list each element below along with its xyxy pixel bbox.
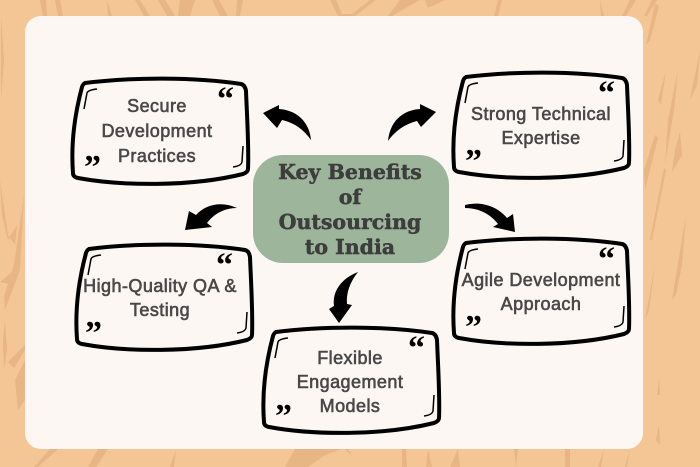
- card: Secure Development Practices: “: [217, 81, 234, 118]
- card: Strong Technical Expertise: “: [598, 75, 615, 112]
- arrow: to Agile Development Approach: [465, 204, 515, 232]
- card: Agile Development Approach: Approach: [501, 294, 581, 314]
- card: High-Quality QA & Testing: ”: [85, 315, 102, 352]
- card: Strong Technical Expertise: ”: [465, 143, 482, 180]
- card: Strong Technical Expertise: Expertise: [501, 128, 581, 148]
- central title block: Outsourcing: [279, 210, 421, 234]
- card: Secure Development Practices: [72, 79, 248, 186]
- card: Secure Development Practices: Secure: [127, 96, 187, 116]
- arrow: to Flexible Engagement Models: [329, 272, 358, 323]
- card: Agile Development Approach: ”: [465, 309, 482, 346]
- card: High-Quality QA & Testing: High-Quality QA &: [83, 276, 237, 296]
- central title block: of: [339, 185, 362, 209]
- central title block: to India: [305, 235, 395, 259]
- card: Secure Development Practices: Development: [101, 121, 213, 141]
- card: Strong Technical Expertise: Strong Technical: [471, 104, 611, 124]
- card: Flexible Engagement Models: ”: [275, 398, 292, 435]
- card: Flexible Engagement Models: Models: [320, 396, 380, 416]
- card: Secure Development Practices: ”: [84, 149, 101, 186]
- card: High-Quality QA & Testing: Testing: [130, 300, 190, 320]
- card: Flexible Engagement Models: “: [408, 330, 425, 367]
- card: Agile Development Approach: Agile Development: [462, 270, 620, 290]
- card: High-Quality QA & Testing: “: [216, 247, 233, 284]
- card: Agile Development Approach: “: [598, 241, 615, 278]
- central title block: Key Benefits: [278, 160, 422, 184]
- card: Flexible Engagement Models: Engagement: [297, 372, 403, 392]
- arrow: to Strong Technical Expertise: [388, 104, 436, 141]
- card: High-Quality QA & Testing: [76, 245, 252, 352]
- arrow: to High-Quality QA & Testing: [185, 204, 237, 230]
- card: Flexible Engagement Models: Flexible: [317, 348, 383, 368]
- central title block: [253, 155, 449, 263]
- card: Secure Development Practices: Practices: [118, 146, 196, 166]
- card: Strong Technical Expertise: [453, 73, 629, 180]
- arrow: to Secure Development Practices: [263, 105, 311, 140]
- card: Flexible Engagement Models: [263, 328, 439, 435]
- card: Agile Development Approach: [453, 239, 629, 346]
